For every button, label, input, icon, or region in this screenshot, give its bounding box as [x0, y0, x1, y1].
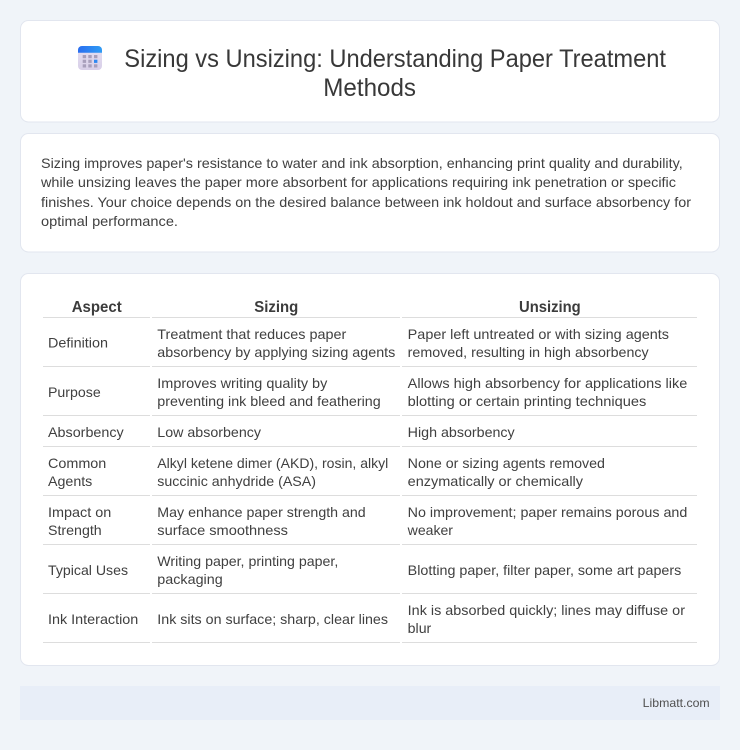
row: Common Agents: enzymatically or chemically [408, 473, 583, 489]
title [124, 45, 666, 102]
row: Impact on Strength: No improvement; paper remains porous and [408, 504, 687, 520]
row: Definition [43, 326, 697, 367]
row: Definition: Treatment that reduces paper [157, 326, 347, 342]
row: Definition: Definition [48, 334, 108, 350]
text block: introduction: Sizing improves paper's resistance to water and ink absorption, enhancing print quality and durability, [41, 155, 683, 171]
row: Purpose: Improves writing quality by [157, 375, 327, 391]
panel: introduction [20, 134, 720, 252]
text block: introduction: finishes. Your choice depends on the desired balance between ink holdout and surface absorbency for [41, 194, 691, 210]
row: Impact on Strength: weaker [407, 522, 453, 538]
table header row: Aspect [72, 299, 122, 316]
row: Purpose: Purpose [48, 384, 101, 400]
table header row: Unsizing [519, 299, 581, 316]
row: Impact on Strength: Impact on [48, 504, 111, 520]
row: Absorbency: High absorbency [408, 424, 515, 440]
row: Purpose: blotting or certain printing techniques [408, 393, 646, 409]
row: Definition: removed, resulting in high absorbency [408, 344, 649, 360]
table header row [43, 299, 697, 318]
row: Ink Interaction: Ink Interaction [48, 611, 138, 627]
row: Common Agents: Agents [48, 473, 92, 489]
row: Typical Uses: Blotting paper, filter paper, some art papers [408, 562, 681, 578]
row: Absorbency: Low absorbency [157, 424, 261, 440]
row: Ink Interaction [43, 602, 697, 643]
row: Impact on Strength: Strength [48, 522, 102, 538]
row: Common Agents: Common [48, 455, 106, 471]
row: Impact on Strength: surface smoothness [157, 522, 288, 538]
footer [20, 686, 720, 720]
row: Common Agents: None or sizing agents removed [408, 455, 605, 471]
row: Purpose: Allows high absorbency for applications like [408, 375, 688, 391]
row: Impact on Strength: May enhance paper strength and [157, 504, 366, 520]
row: Ink Interaction: Ink is absorbed quickly; lines may diffuse or [408, 602, 685, 618]
row: Typical Uses: packaging [157, 571, 223, 587]
panel: comparison table [20, 274, 720, 666]
footer: Libmatt.com [643, 696, 710, 710]
row: Ink Interaction: Ink sits on surface; sharp, clear lines [157, 611, 388, 627]
text block: introduction: while unsizing leaves the paper more absorbent for applications requiring ink penetration or specific [40, 174, 676, 190]
row: Definition: absorbency by applying sizing agents [157, 344, 395, 360]
row: Common Agents: Alkyl ketene dimer (AKD), rosin, alkyl [157, 455, 388, 471]
row: Absorbency: Absorbency [48, 424, 124, 440]
row: Common Agents: succinic anhydride (ASA) [157, 473, 316, 489]
row: Purpose: preventing ink bleed and feathering [157, 393, 381, 409]
row: Ink Interaction: blur [408, 620, 432, 636]
title: Methods [323, 74, 416, 102]
table header row: Sizing [254, 299, 298, 316]
row: Impact on Strength [43, 504, 697, 545]
icon: calendar [78, 46, 102, 70]
text block: introduction [40, 155, 691, 229]
row: Typical Uses [43, 553, 697, 594]
row: Purpose [43, 375, 697, 416]
row: Absorbency [43, 424, 697, 447]
row: Typical Uses: Writing paper, printing paper, [157, 553, 338, 569]
panel: title card [20, 20, 720, 122]
text block: introduction: optimal performance. [41, 213, 178, 229]
row: Definition: Paper left untreated or with sizing agents [408, 326, 669, 342]
row: Typical Uses: Typical Uses [48, 562, 128, 578]
title: Sizing vs Unsizing: Understanding Paper Treatment [124, 45, 666, 73]
row: Common Agents [43, 455, 697, 496]
